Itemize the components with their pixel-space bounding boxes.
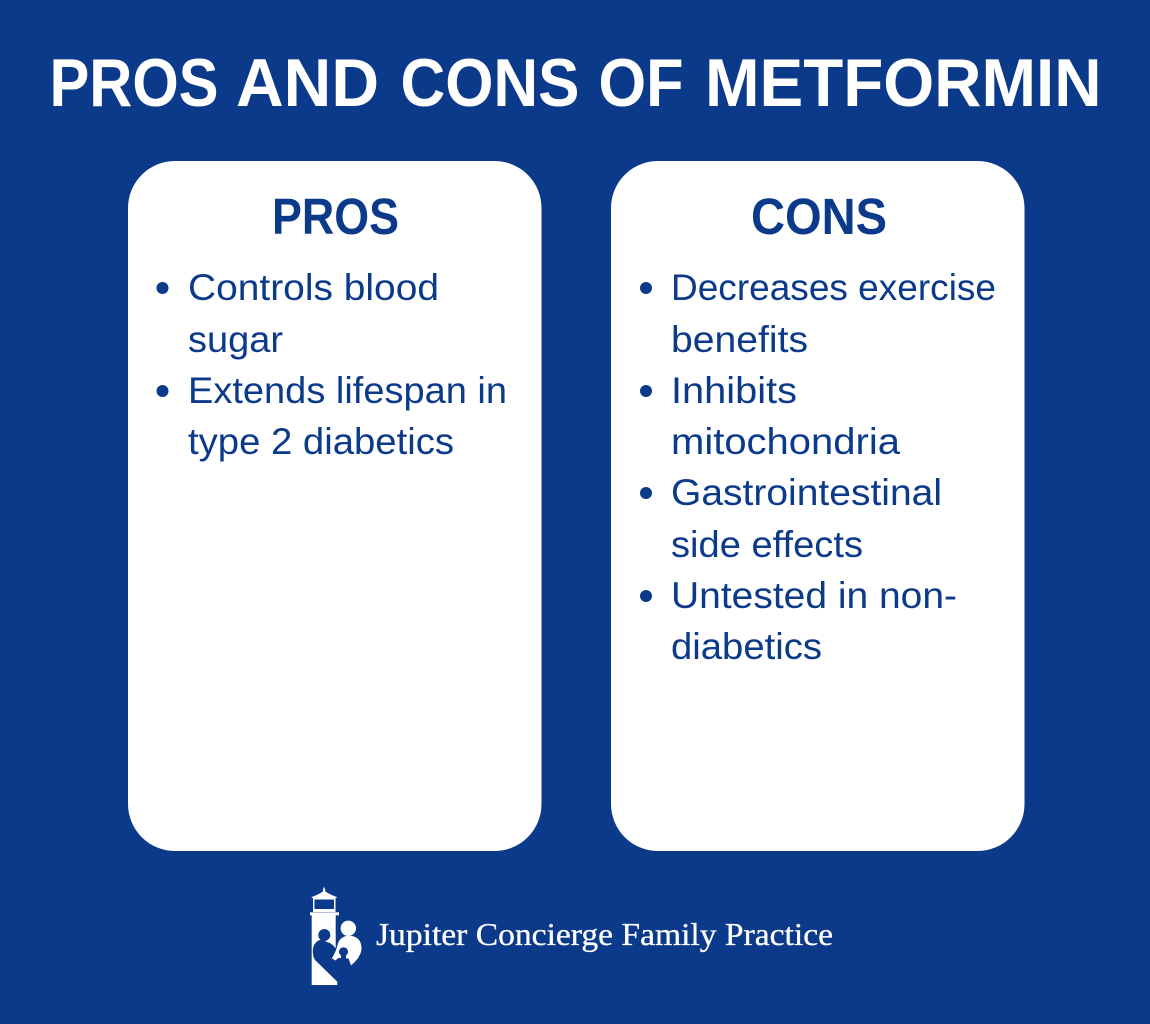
title: OF [598, 46, 684, 121]
title: PROS [50, 46, 218, 121]
panel: pros [128, 161, 542, 851]
list: cons: Decreases exercise [671, 266, 996, 308]
list: cons: Inhibits [671, 369, 797, 411]
icon: lighthouse with family [310, 886, 362, 985]
title: AND [236, 46, 379, 121]
list: cons: side effects [671, 523, 863, 565]
title: METFORMIN [705, 46, 1102, 121]
logo: Jupiter Concierge Family Practice [310, 886, 833, 985]
list: cons [640, 266, 996, 667]
list: pros: type 2 diabetics [188, 420, 454, 462]
list: pros: sugar [188, 318, 283, 360]
list: cons: Untested in non- [671, 574, 957, 616]
list: cons: diabetics [671, 625, 822, 667]
list: cons: Gastrointestinal [671, 471, 942, 513]
list: cons: benefits [671, 318, 808, 360]
logo wordmark: Jupiter Concierge Family Practice [376, 916, 833, 952]
title: CONS [400, 46, 580, 121]
panel: cons [611, 161, 1024, 851]
heading: cons: CONS [751, 188, 887, 245]
title [50, 46, 1102, 121]
list: pros [156, 266, 507, 462]
list: pros: Controls blood [188, 266, 439, 308]
list: pros: Extends lifespan in [188, 369, 507, 411]
heading: pros: PROS [272, 188, 399, 245]
list: cons: mitochondria [671, 420, 900, 462]
